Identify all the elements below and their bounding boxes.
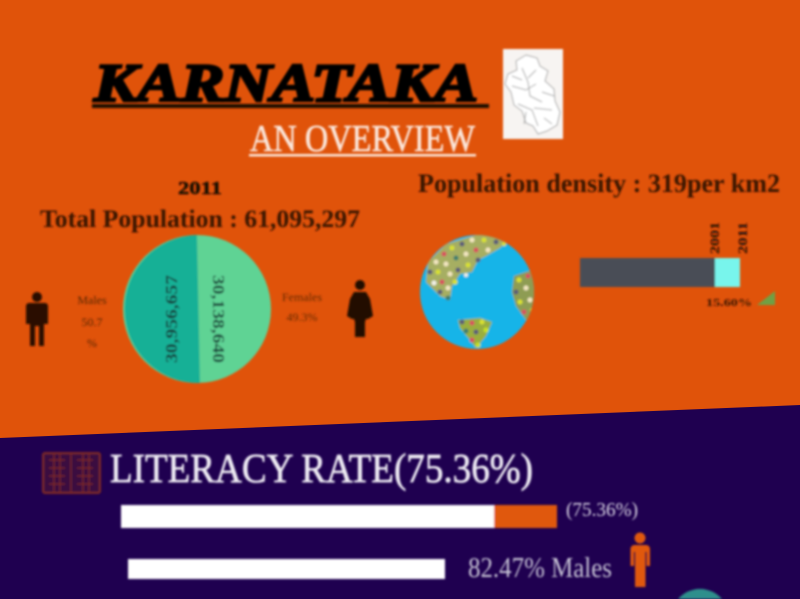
total population heading: Total Population : 61,095,297 <box>40 206 360 233</box>
female share label: 49.3% <box>286 310 318 324</box>
pie chart: male and female population: 30,956,657 <box>162 274 181 363</box>
icon: partial teal globe <box>678 589 722 599</box>
male share label: 50.7 <box>82 315 102 329</box>
female share label: Females <box>282 290 322 304</box>
icon: orange male figure <box>630 532 650 587</box>
male share label <box>77 293 107 350</box>
bar: overall literacy <box>121 505 557 528</box>
bar: male literacy <box>128 559 445 579</box>
bar chart: density growth 2001 to 2011: 2011 <box>735 222 750 254</box>
icon: male figure <box>26 292 48 346</box>
subtitle: An Overview: AN OVERVIEW <box>250 118 475 160</box>
navy lower panel <box>0 405 800 599</box>
pie chart: male and female population: 30,138,640 <box>209 275 228 363</box>
icon: Karnataka map <box>503 49 563 139</box>
population density heading: Population density : 319per km2 <box>418 169 780 198</box>
year label: 2011 <box>178 178 222 198</box>
female share label <box>282 290 322 324</box>
male share label: % <box>87 336 97 350</box>
icon: female figure <box>347 280 373 337</box>
icon: open book <box>43 453 100 493</box>
label: overall literacy value: (75.36%) <box>566 499 638 521</box>
pie chart: male and female population <box>123 235 271 383</box>
heading: literacy rate: LITERACY RATE(75.36%) <box>110 445 533 491</box>
male share label: Males <box>77 293 107 307</box>
title: Karnataka: KARNATAKA <box>93 53 478 113</box>
icon: globe <box>420 234 540 349</box>
growth percentage label: 15.60% <box>706 297 752 309</box>
bar chart: density growth 2001 to 2011 <box>580 222 750 287</box>
label: male literacy value: 82.47% Males <box>468 553 612 584</box>
bar chart: density growth 2001 to 2011: 2001 <box>707 222 722 254</box>
icon: growth triangle <box>757 291 775 305</box>
